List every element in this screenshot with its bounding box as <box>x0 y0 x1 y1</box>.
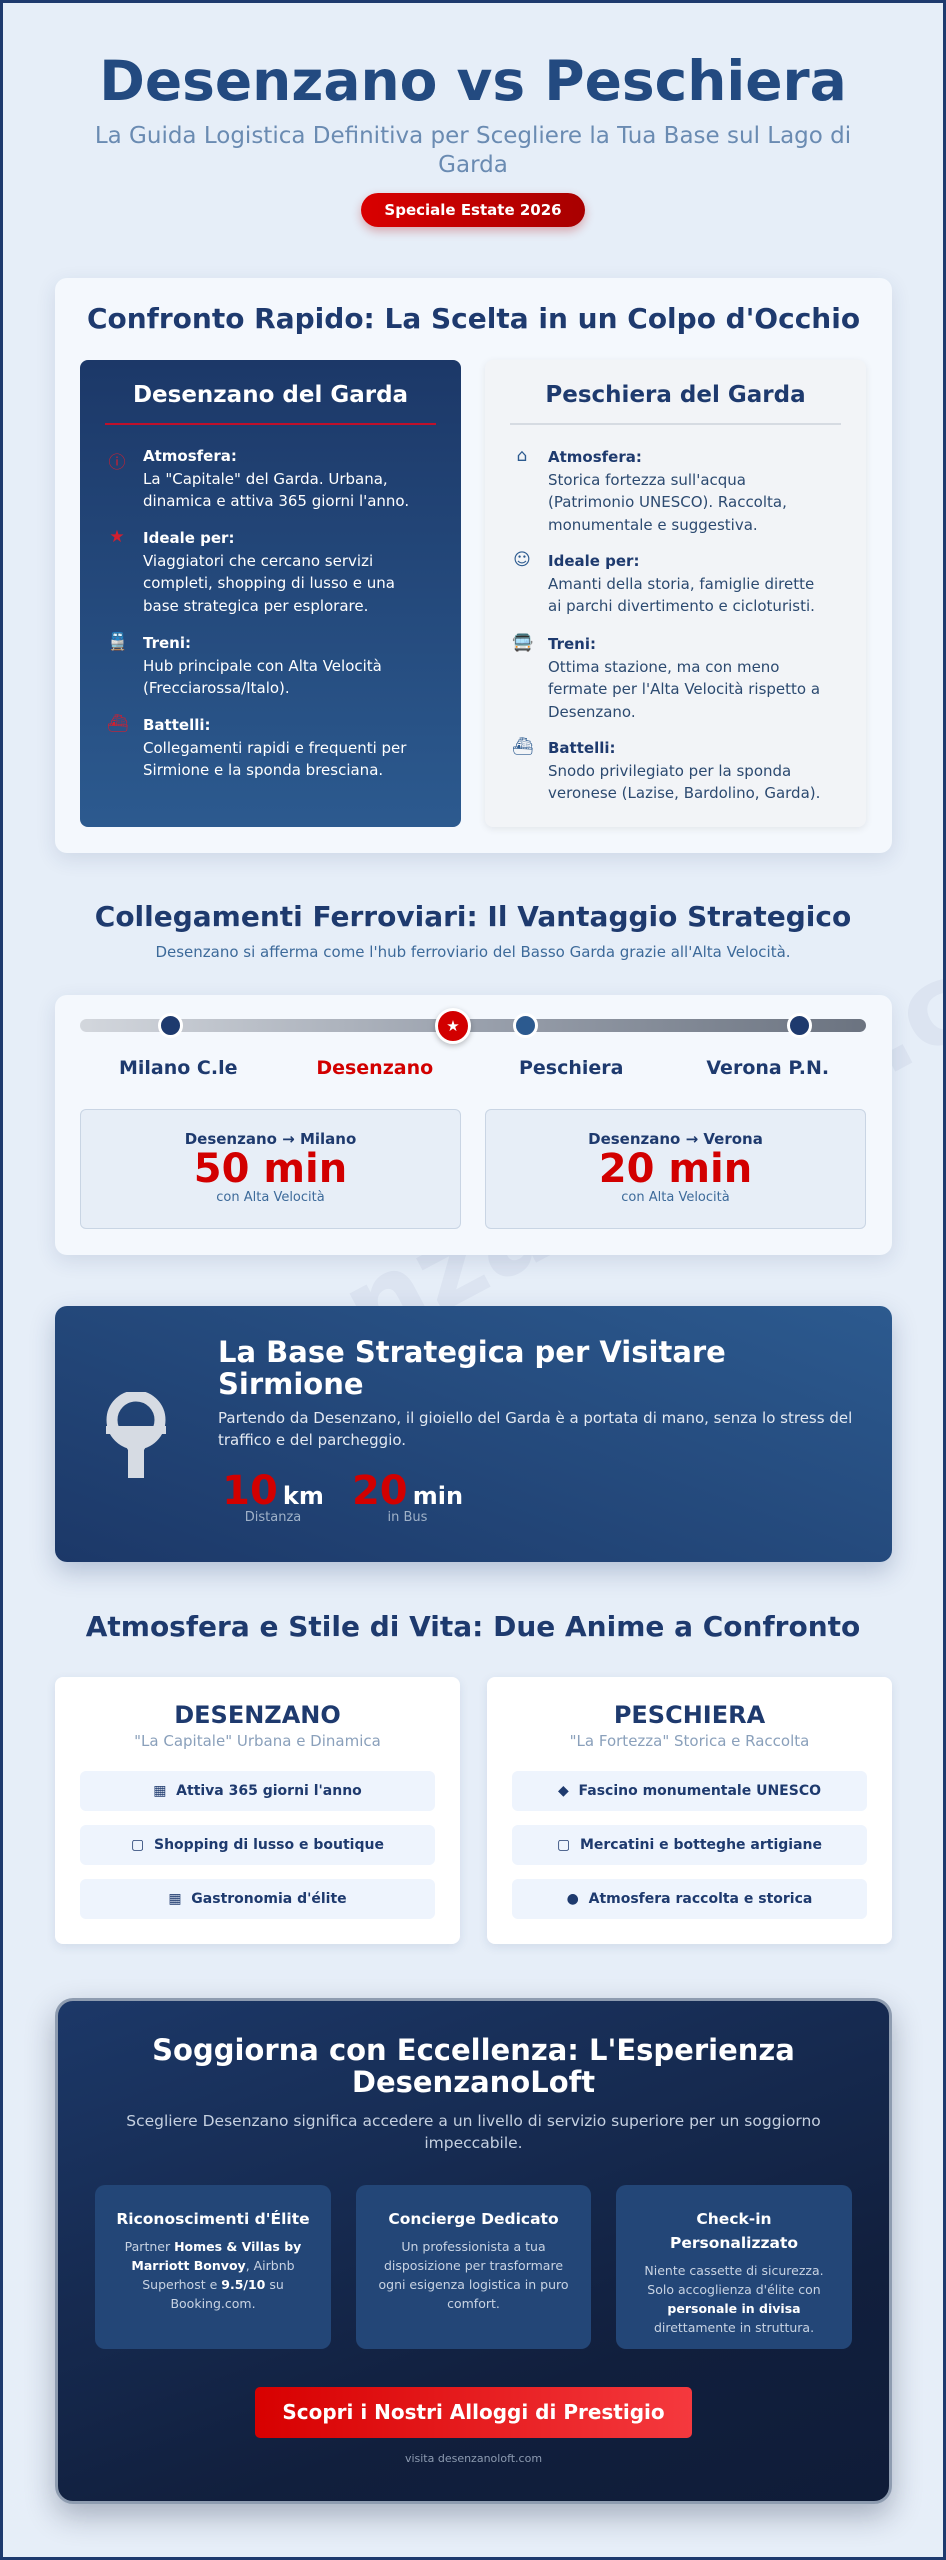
panel: desenzanoloft <box>55 1998 892 2504</box>
pill: ▦ Gastronomia d'élite <box>168 1891 347 1907</box>
card: desenzano: Treni: <box>143 634 191 652</box>
subcard: concierge: Concierge Dedicato <box>388 2210 559 2228</box>
card: peschiera lifestyle <box>487 1677 892 1944</box>
box: milano <box>80 1109 461 1229</box>
card: peschiera: 🚍 <box>512 633 533 653</box>
subcard: concierge: Un professionista a tua disposizione per trasformare ogni esigenza logistica in puro comfort. <box>378 2239 569 2311</box>
card: desenzano: Atmosfera: <box>143 447 237 465</box>
badge <box>361 193 585 227</box>
intro: Scegliere Desenzano significa accedere a un livello di servizio superiore per un soggiorno impeccabile. <box>126 2112 821 2152</box>
title: Desenzano vs Peschiera <box>99 49 847 113</box>
pill: ● Atmosfera raccolta e storica <box>567 1891 812 1907</box>
subcard: riconoscimenti: Partner Homes & Villas by Marriott Bonvoy, Airbnb Superhost e 9.5/10 su Booking.com. <box>125 2239 301 2311</box>
item ideale <box>513 550 815 615</box>
item treni <box>107 632 382 697</box>
card: desenzano: Ideale per: <box>143 529 234 547</box>
card: peschiera lifestyle: "La Fortezza" Storica e Raccolta <box>570 1732 809 1750</box>
box: verona <box>485 1109 866 1229</box>
title: Soggiorna con Eccellenza: L'Esperienza DesenzanoLoft <box>152 2033 795 2099</box>
track <box>80 1019 866 1032</box>
subcard: check-in: Check-in Personalizzato <box>670 2210 798 2252</box>
item battelli <box>512 737 820 802</box>
heading: collegamenti: Collegamenti Ferroviari: Il Vantaggio Strategico <box>95 900 851 933</box>
heading: atmosfera: Atmosfera e Stile di Vita: Due Anime a Confronto <box>86 1610 860 1643</box>
card: desenzano lifestyle <box>55 1677 460 1944</box>
card title: Peschiera del Garda <box>545 382 806 408</box>
stat: distanza: 10 km <box>222 1468 324 1514</box>
pill <box>512 1825 867 1865</box>
subcard: check-in: Niente cassette di sicurezza. Solo accoglienza d'élite con personale in divisa direttamente in struttura. <box>644 2263 824 2335</box>
stat: bus: 20 min <box>352 1468 463 1514</box>
pill: ◆ Fascino monumentale UNESCO <box>558 1783 821 1799</box>
station labels: Peschiera <box>519 1057 624 1079</box>
button: Scopri i Nostri Alloggi di Prestigio <box>282 2400 665 2424</box>
stop: desenzano <box>435 1008 471 1044</box>
card: desenzano: ★ <box>109 527 125 547</box>
stop: milano <box>158 1013 183 1038</box>
card: peschiera: Treni: <box>548 635 596 653</box>
card: desenzano: ⓘ <box>108 453 126 473</box>
card: peschiera: ⛴ <box>512 737 534 757</box>
pill <box>80 1879 435 1919</box>
pill: ▢ Shopping di lusso e boutique <box>131 1837 384 1853</box>
subcard: concierge <box>356 2185 591 2349</box>
pill <box>80 1825 435 1865</box>
station labels: Milano C.le <box>119 1057 238 1079</box>
box: milano: con Alta Velocità <box>216 1190 325 1205</box>
card: desenzano: ⛴ <box>107 714 129 734</box>
card: peschiera <box>485 360 866 827</box>
card: peschiera: Ideale per: <box>548 552 639 570</box>
stop: peschiera <box>513 1013 538 1038</box>
box: verona: con Alta Velocità <box>621 1190 730 1205</box>
card: peschiera: Ottima stazione, ma con meno fermate per l'Alta Velocità rispetto a Desenzano. <box>548 658 820 720</box>
subcard: riconoscimenti: Riconoscimenti d'Élite <box>116 2210 310 2228</box>
station labels <box>119 1057 829 1079</box>
panel: confronto rapido <box>55 278 892 853</box>
item ideale <box>109 527 395 614</box>
pill: ▦ Attiva 365 giorni l'anno <box>153 1783 362 1799</box>
card: desenzano lifestyle: DESENZANO <box>174 1701 341 1729</box>
subcard: riconoscimenti <box>95 2185 331 2349</box>
banner: sirmione <box>55 1306 892 1562</box>
panel: railway <box>55 995 892 1255</box>
item atmosfera <box>517 446 787 534</box>
box: verona: Desenzano → Verona <box>588 1130 763 1148</box>
card: desenzano: La "Capitale" del Garda. Urbana, dinamica e attiva 365 giorni l'anno. <box>143 470 409 510</box>
card: desenzano: Collegamenti rapidi e frequenti per Sirmione e la sponda bresciana. <box>143 738 406 779</box>
card: peschiera: Battelli: <box>548 739 616 757</box>
banner text: Partendo da Desenzano, il gioiello del Garda è a portata di mano, senza lo stress del traffico e del parcheggio. <box>218 1409 852 1449</box>
card: desenzano: Battelli: <box>143 716 210 734</box>
stat: distanza: Distanza <box>245 1510 301 1525</box>
box: milano: 50 min <box>194 1146 347 1192</box>
pill: ▢ Mercatini e botteghe artigiane <box>557 1837 822 1853</box>
card: desenzano lifestyle: "La Capitale" Urbana e Dinamica <box>134 1732 381 1750</box>
stop: verona <box>787 1013 812 1038</box>
card: peschiera: ⌂ <box>517 446 527 466</box>
pill <box>80 1771 435 1811</box>
subcard: check-in <box>616 2185 852 2349</box>
card: desenzano: 🚆 <box>107 632 128 652</box>
card: desenzano: Viaggiatori che cercano servizi completi, shopping di lusso e una base strategica per esplorare. <box>143 552 395 614</box>
button <box>255 2387 692 2438</box>
subtitle: La Guida Logistica Definitiva per Scegliere la Tua Base sul Lago di Garda <box>95 123 851 178</box>
card: peschiera: Storica fortezza sull'acqua (Patrimonio UNESCO). Raccolta, monumentale e suggestiva. <box>548 470 787 534</box>
card title: Desenzano del Garda <box>133 382 408 408</box>
card: peschiera: Snodo privilegiato per la sponda veronese (Lazise, Bardolino, Garda). <box>548 762 820 802</box>
card: desenzano <box>80 360 461 827</box>
stop: desenzano: ★ <box>446 1017 460 1035</box>
footer link: visita desenzanoloft.com <box>405 2452 542 2465</box>
card: peschiera: Amanti della storia, famiglie dirette ai parchi divertimento e cicloturisti. <box>548 574 815 615</box>
box: verona: 20 min <box>599 1146 752 1192</box>
icon: location <box>106 1392 166 1478</box>
item atmosfera <box>108 447 409 510</box>
item battelli <box>107 714 406 779</box>
stat: bus: in Bus <box>388 1510 427 1525</box>
pill <box>512 1879 867 1919</box>
card: peschiera: ☺ <box>513 550 531 570</box>
item treni <box>512 633 820 720</box>
station labels: Desenzano <box>316 1057 433 1079</box>
card: peschiera lifestyle: PESCHIERA <box>614 1701 765 1729</box>
card: peschiera: Atmosfera: <box>548 448 642 466</box>
banner title: La Base Strategica per Visitare Sirmione <box>218 1335 726 1401</box>
box: milano: Desenzano → Milano <box>185 1130 356 1148</box>
heading: Confronto Rapido: La Scelta in un Colpo d'Occhio <box>87 302 860 335</box>
pill <box>512 1771 867 1811</box>
subheading: Desenzano si afferma come l'hub ferroviario del Basso Garda grazie all'Alta Velocità. <box>155 943 791 961</box>
station labels: Verona P.N. <box>706 1057 829 1079</box>
card: desenzano: Hub principale con Alta Velocità (Frecciarossa/Italo). <box>143 656 382 697</box>
badge: Speciale Estate 2026 <box>384 201 562 219</box>
